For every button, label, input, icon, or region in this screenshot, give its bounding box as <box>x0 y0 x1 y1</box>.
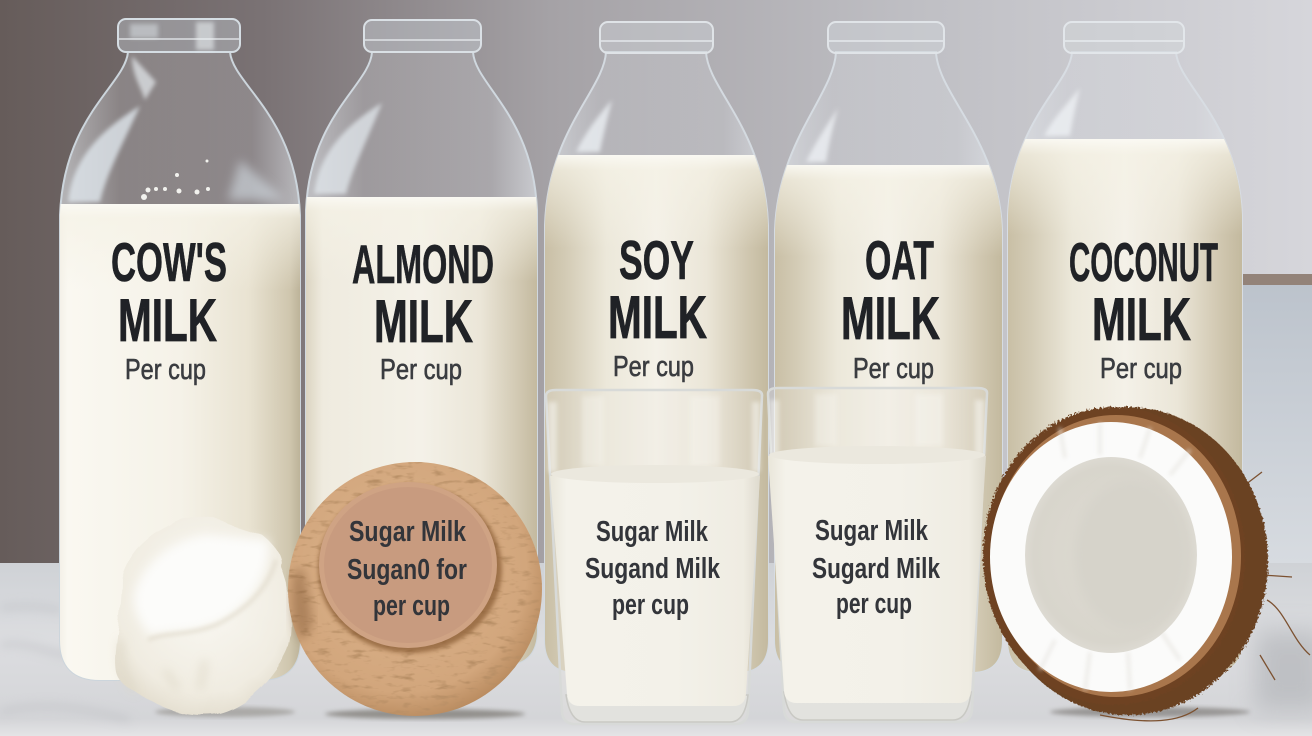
wall shelf at right <box>1240 274 1312 574</box>
label <box>812 515 941 620</box>
label: Per cup <box>853 353 934 385</box>
milk fill <box>304 197 539 667</box>
white flesh <box>990 422 1232 692</box>
milk <box>768 448 986 703</box>
bottle: almond milk <box>304 20 539 667</box>
glass shape <box>306 52 537 665</box>
disc text: Sugan0 for <box>347 554 467 586</box>
reflection <box>68 56 285 202</box>
label: Per cup <box>1100 353 1182 385</box>
disc text <box>347 516 467 622</box>
glass shape <box>775 52 1002 672</box>
bottle rim <box>364 20 481 52</box>
label: Sugand Milk <box>585 553 721 585</box>
round label disc <box>318 482 502 653</box>
milk bubbles <box>141 160 210 200</box>
disc text: Sugar Milk <box>349 516 467 548</box>
reflection <box>576 100 612 152</box>
cavity <box>1025 457 1197 653</box>
flesh segments <box>1040 423 1190 690</box>
label <box>111 231 227 386</box>
glass base <box>784 692 971 720</box>
label: Sugar Milk <box>815 515 929 547</box>
glass shape <box>1008 52 1242 672</box>
glass body <box>768 388 987 722</box>
reflection <box>1044 88 1080 136</box>
label <box>608 229 707 383</box>
label: MILK <box>118 287 217 354</box>
glass highlights <box>548 396 760 472</box>
label: per cup <box>612 589 689 621</box>
glass: right <box>768 388 987 722</box>
label: SOY <box>619 229 694 291</box>
milk fill <box>58 204 302 684</box>
glass shape <box>545 52 768 672</box>
bottle rim <box>600 22 713 53</box>
label: MILK <box>374 288 473 355</box>
husk fibres <box>1100 472 1310 721</box>
label: Per cup <box>125 354 206 386</box>
marble table <box>0 563 1312 736</box>
label: Sugar Milk <box>596 516 709 548</box>
label: per cup <box>836 588 912 620</box>
label: ALMOND <box>352 233 494 295</box>
label: Per cup <box>380 354 462 386</box>
label <box>1069 231 1218 385</box>
almond ball with round label <box>288 462 542 719</box>
label <box>585 516 721 621</box>
milk fill <box>773 165 1004 675</box>
label: Per cup <box>613 351 694 383</box>
bottle rim <box>1064 22 1184 53</box>
label <box>841 229 940 385</box>
label: MILK <box>1092 286 1191 353</box>
bottle rim <box>118 19 240 52</box>
glass shape <box>60 52 300 680</box>
glass body <box>546 390 762 724</box>
husk back <box>988 407 1268 715</box>
glass base <box>566 695 748 722</box>
bottle: soy milk <box>543 22 770 675</box>
almond lump <box>115 518 295 717</box>
reflection <box>314 103 382 194</box>
glass highlights <box>770 394 984 455</box>
glass: left <box>546 390 762 724</box>
bottle: cow's milk <box>58 19 302 684</box>
label: OAT <box>865 229 934 291</box>
background wall <box>0 0 1312 570</box>
husk rim <box>983 407 1245 705</box>
reflection <box>806 108 838 162</box>
label: Sugard Milk <box>812 553 941 585</box>
bottle: oat milk <box>773 22 1004 675</box>
label <box>352 233 494 386</box>
label: MILK <box>841 285 940 352</box>
bottle rim <box>828 22 944 53</box>
milk fill <box>543 155 770 675</box>
milk fill <box>1006 139 1244 674</box>
bottle: coconut milk <box>1006 22 1244 674</box>
label: COW'S <box>111 231 227 293</box>
disc text: per cup <box>373 590 450 622</box>
coconut half <box>983 407 1310 721</box>
label: MILK <box>608 284 707 351</box>
milk <box>550 467 760 706</box>
